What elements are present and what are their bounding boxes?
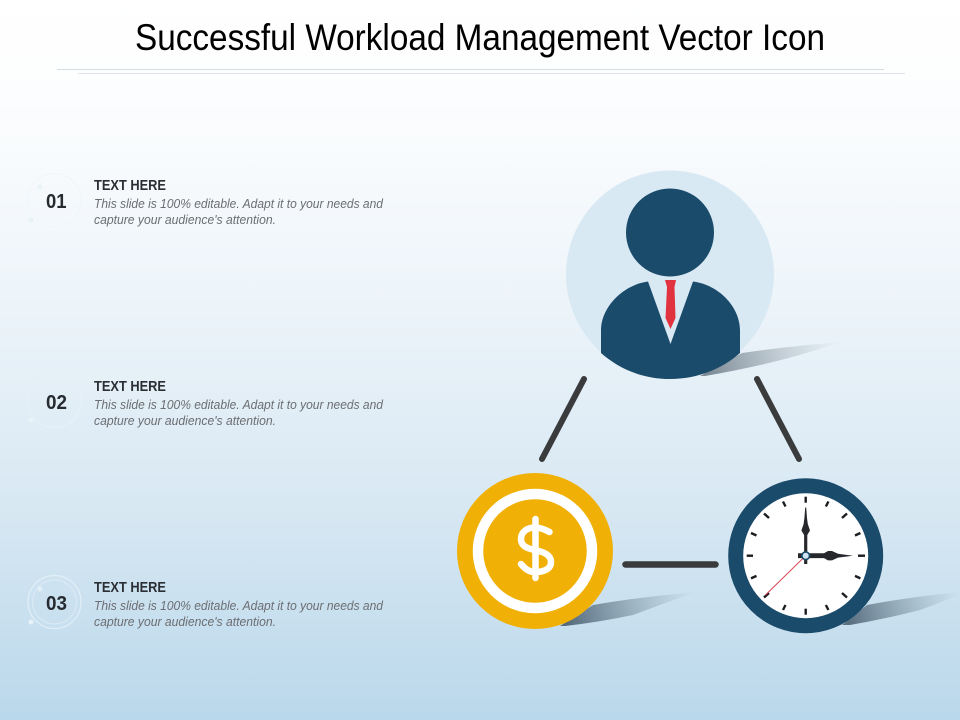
- text block 02: capture your audience's attention.: [94, 413, 276, 428]
- clock ticks: [747, 497, 865, 615]
- clock hub: [802, 552, 810, 560]
- title: Successful Workload Management Vector Icon: [135, 17, 825, 58]
- number badge 01: [28, 174, 81, 226]
- connector: person to clock: [757, 379, 799, 459]
- text block 02: This slide is 100% editable. Adapt it to your needs and: [94, 397, 384, 412]
- hour hand: [798, 551, 853, 560]
- minute hand: [801, 508, 810, 564]
- text block 01: TEXT HERE: [94, 177, 166, 194]
- icon: clock: [736, 486, 960, 626]
- text block 01: capture your audience's attention.: [94, 212, 276, 227]
- second hand: [766, 556, 806, 595]
- item 01: [28, 174, 384, 227]
- icon: businessman: [566, 170, 842, 379]
- text block 02: [94, 378, 384, 428]
- text block 03: This slide is 100% editable. Adapt it to your needs and: [94, 598, 384, 613]
- number badge 01: 01: [46, 190, 66, 213]
- number badge 03: 03: [46, 592, 67, 615]
- icon: dollar coin: [457, 473, 696, 629]
- connector: person to coin: [542, 379, 584, 459]
- text block 01: This slide is 100% editable. Adapt it to your needs and: [94, 196, 384, 211]
- item 02: [28, 374, 384, 428]
- text block 03: capture your audience's attention.: [94, 614, 276, 629]
- text block 02: TEXT HERE: [94, 378, 166, 395]
- number badge 02: [28, 374, 81, 428]
- number badge 03: [28, 576, 81, 628]
- number badge 02: 02: [46, 391, 67, 414]
- item 03: [28, 576, 384, 629]
- connector: coin to clock: [626, 561, 716, 568]
- text block 03: TEXT HERE: [94, 579, 166, 596]
- text block 01: [94, 177, 384, 227]
- text block 03: [94, 579, 384, 629]
